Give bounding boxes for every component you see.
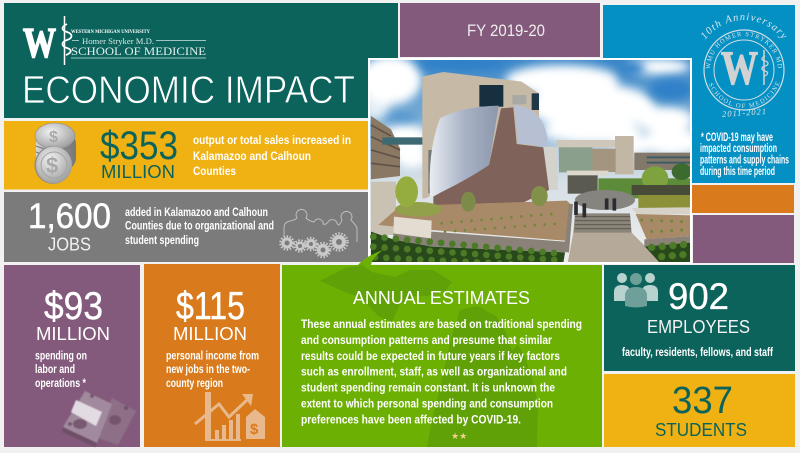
panel: annual estimates <box>282 265 602 447</box>
icon: anniversary seal <box>702 13 786 119</box>
figure: 93 million <box>36 285 110 344</box>
icon: silver coins: $ <box>46 153 58 178</box>
text: output description <box>193 133 351 178</box>
figure: 115 million: MILLION <box>173 324 247 344</box>
text: output description: Kalamazoo and Calhoun <box>193 149 311 163</box>
text: estimates paragraph: These annual estimates are based on traditional spending <box>301 317 582 331</box>
text: income description: personal income from <box>166 348 259 362</box>
pedestrians <box>576 198 614 217</box>
panel: jobs stat <box>4 192 370 262</box>
figure: 115 million <box>173 285 247 344</box>
figure: 115 million: $115 <box>176 285 245 328</box>
icon: michigan map silhouette <box>320 265 538 447</box>
decorative green tip of map <box>358 250 383 265</box>
panel: fiscal year <box>400 3 600 57</box>
figure: 93 million: MILLION <box>36 324 110 344</box>
figure: 902 employees <box>647 276 750 337</box>
text: jobs description: added in Kalamazoo and Calhoun <box>125 205 268 219</box>
icon: university W logo <box>23 16 206 67</box>
left tower and skybridge <box>371 116 400 179</box>
panel: output stat <box>4 121 370 190</box>
title: ECONOMIC IMPACT <box>22 69 355 112</box>
panel: economic impact header <box>4 3 398 118</box>
icon: university W logo: SCHOOL OF MEDICINE <box>71 46 206 58</box>
text: estimates paragraph: and consumption patterns and presume that similar <box>301 333 552 347</box>
figure: 337: 337 <box>672 380 733 422</box>
figure: 353 million: MILLION <box>101 162 175 182</box>
distant lawn <box>598 178 691 198</box>
text: spending description: spending on <box>35 348 87 362</box>
figure: 353 million: $353 <box>100 124 178 168</box>
text: output description: Counties <box>193 164 236 178</box>
icon: growth chart and price tag: $ <box>250 421 259 438</box>
icon: anniversary seal: WMU HOMER STRYKER MD <box>706 32 782 68</box>
panel: 115 million <box>144 264 280 447</box>
steel curved walls <box>430 106 499 197</box>
icon: people and gears <box>280 209 357 257</box>
icon: anniversary seal: 2011-2021 <box>722 106 766 119</box>
icon: university W logo: WESTERN MICHIGAN UNIVERSITY <box>71 29 150 35</box>
text: section heading: ANNUAL ESTIMATES <box>353 287 530 308</box>
text: jobs description: Counties due to organizational and <box>125 218 274 232</box>
text: estimates paragraph: student spending remain constant. It is unknown the <box>301 380 555 394</box>
panel: fiscal year: FY 2019-20 <box>467 21 545 40</box>
text: estimates paragraph: extent to which personal spending and consumption <box>301 396 553 410</box>
figure: 1600 jobs: 1,600 <box>28 197 111 236</box>
text: estimates paragraph <box>301 317 582 426</box>
text: output description: output or total sales increased in <box>193 133 351 147</box>
icon: anniversary seal: W <box>721 42 758 95</box>
icon: two stars: ★★ <box>451 432 467 442</box>
panel: employees <box>604 265 795 371</box>
text: estimates paragraph: preferences have been affected by COVID-19. <box>301 412 521 426</box>
panel: students <box>604 374 795 447</box>
text: estimates paragraph: results could be expected in future years if key factors <box>301 349 560 363</box>
figure: 902 employees: EMPLOYEES <box>647 317 750 337</box>
text: covid note <box>700 130 789 178</box>
rear right buildings <box>634 153 691 170</box>
text: spending description: labor and <box>35 362 75 376</box>
brown core <box>433 107 549 207</box>
text: spending description <box>35 348 87 390</box>
main building <box>422 72 539 198</box>
photo: medical school building <box>358 55 702 267</box>
figure: 353 million <box>100 124 178 182</box>
retaining wall and sign <box>393 204 573 252</box>
planting beds <box>378 201 572 241</box>
text: income description: new jobs in the two- <box>166 362 250 376</box>
text: jobs description: student spending <box>125 233 199 247</box>
panel: 93 million <box>4 265 140 447</box>
icon: silver coins: $ <box>49 129 58 146</box>
text: jobs description <box>125 205 274 247</box>
icon: group of people <box>614 273 658 308</box>
figure: 902 employees: 902 <box>668 276 729 317</box>
icon: university W logo: W <box>23 21 56 67</box>
panel: purple accent block <box>693 215 794 263</box>
text: estimates paragraph: such as enrollment, staff, as well as organizational and <box>301 364 567 378</box>
clouds <box>358 55 702 168</box>
text: spending description: operations * <box>35 376 86 390</box>
panel: orange accent block <box>692 185 794 213</box>
icon: silver coins <box>34 123 76 184</box>
text: income description: county region <box>166 376 223 390</box>
patches of blue sky <box>385 56 695 123</box>
text: income description <box>166 348 259 390</box>
icon: money bundles <box>62 391 136 447</box>
figure: 1600 jobs: JOBS <box>48 234 91 254</box>
label: students: STUDENTS <box>655 420 747 440</box>
icon: growth chart and price tag <box>195 392 265 441</box>
plaza and paths <box>371 182 396 235</box>
panel: anniversary and covid note <box>603 5 795 183</box>
figure: 93 million: $93 <box>44 285 103 328</box>
hedges <box>371 232 565 263</box>
figure: 1600 jobs <box>28 197 111 254</box>
icon: anniversary seal: 10th Anniversary <box>702 13 786 40</box>
icon: anniversary seal: SCHOOL OF MEDICINE <box>709 82 780 108</box>
icon: university W logo: Homer Stryker M.D. <box>82 36 154 46</box>
